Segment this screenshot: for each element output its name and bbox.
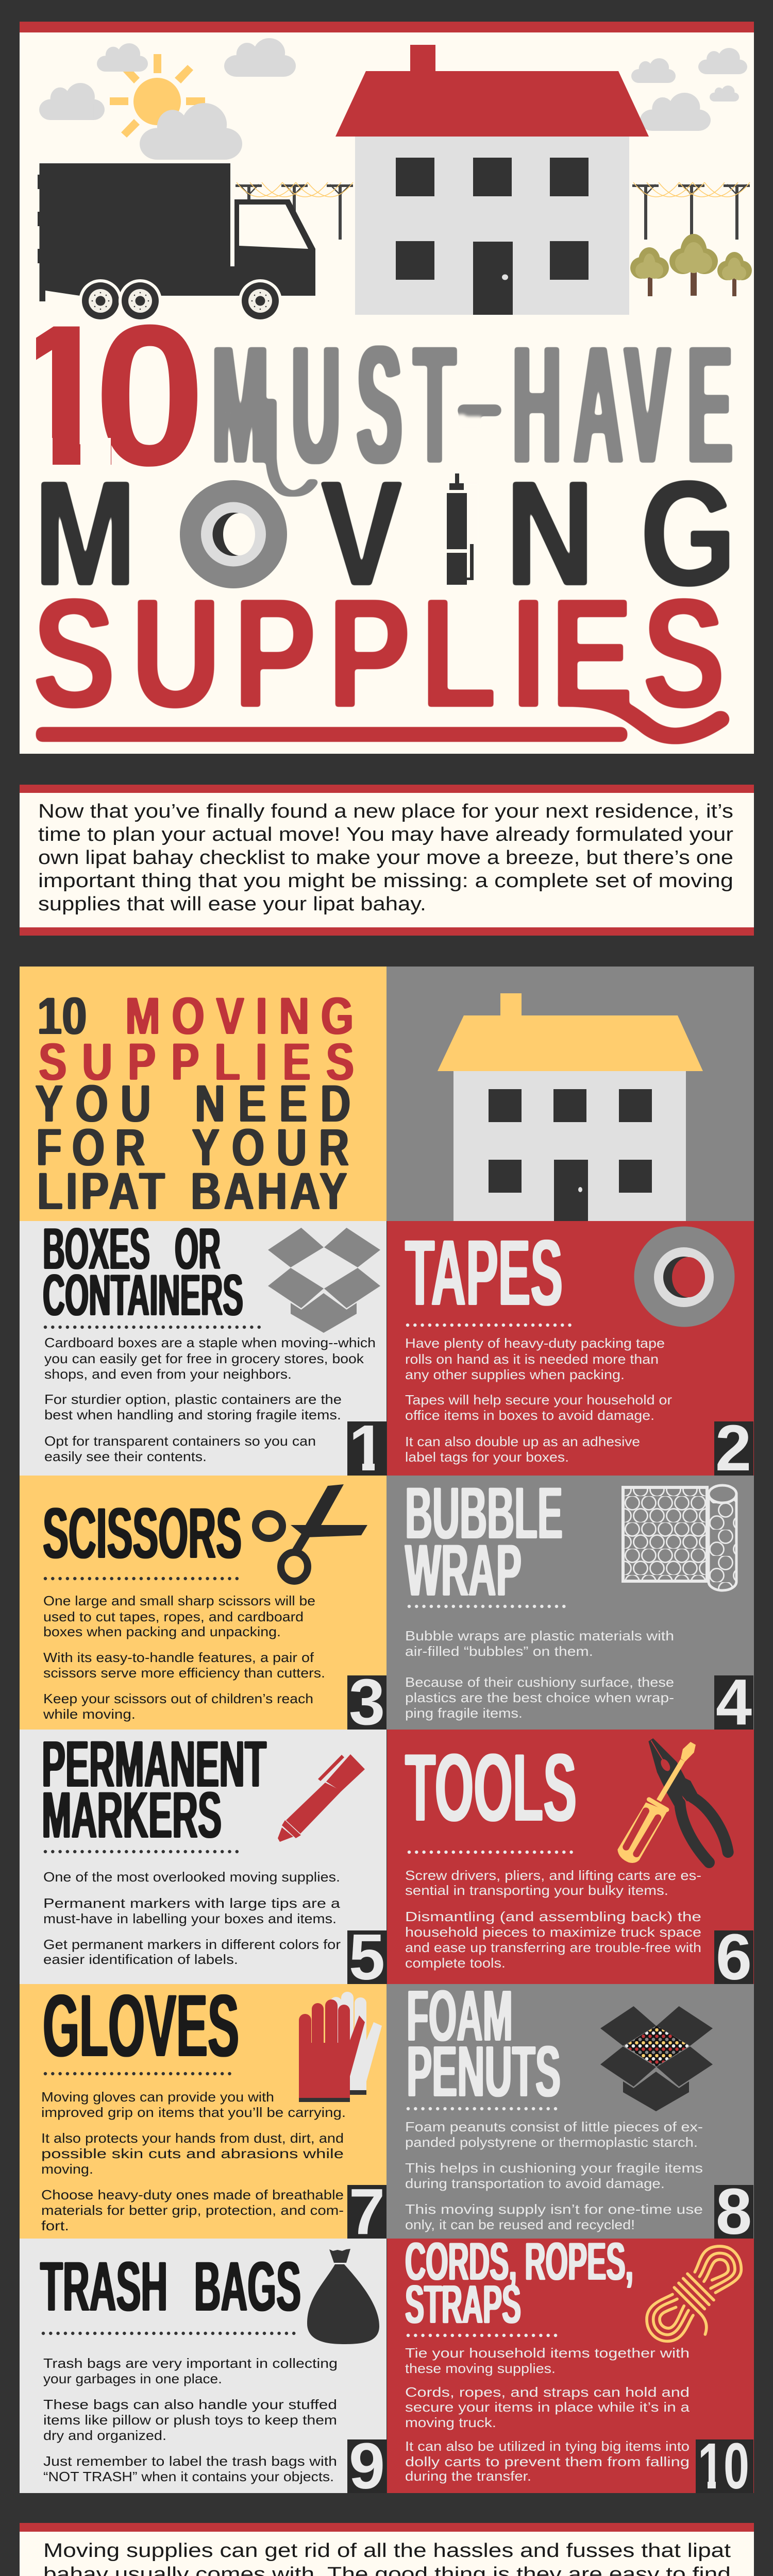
text: tools description: Dismantling (and assembling back) the — [405, 1909, 701, 1924]
icon: scissors — [256, 1484, 367, 1581]
panel: bubble wrap — [386, 1472, 754, 1738]
panel: hero — [5, 22, 754, 754]
text: tapes description: any other supplies when packing. — [405, 1367, 625, 1382]
text: tools description: and ease up transferring are trouble-free with — [405, 1940, 701, 1955]
text: tapes description: label tags for your boxes. — [405, 1449, 569, 1465]
text: cords description — [405, 2345, 690, 2484]
text: cords description: Cords, ropes, and straps can hold and — [405, 2384, 690, 2400]
text: markers description: One of the most overlooked moving supplies. — [43, 1869, 340, 1885]
text: trash bags description — [43, 2355, 338, 2484]
heading: 10 moving supplies you need for your lipat bahay: LIPAT — [37, 1161, 165, 1221]
number 4: 4 — [716, 1666, 752, 1738]
text: bubble wrap description: ping fragile items. — [405, 1705, 523, 1721]
heading: 10 moving supplies you need for your lipat bahay: SUPPLIES — [39, 1032, 354, 1091]
text: markers description: must-have in labelling your boxes and items. — [43, 1911, 337, 1926]
heading: 10 moving supplies you need for your lipat bahay: BAHAY — [191, 1161, 347, 1221]
panel: scissors — [20, 1476, 386, 1738]
text: foam description: This moving supply isn’t for one-time use — [405, 2201, 703, 2217]
number 5: 5 — [349, 1921, 385, 1993]
heading: bubble wrap: WRAP — [405, 1530, 522, 1612]
icon: house with yellow roof — [438, 993, 703, 1222]
heading: cords, ropes, straps: STRAPS — [405, 2274, 521, 2335]
title: supplies: SUPPLIES — [32, 566, 726, 740]
text: cords description: It can also be utilized in tying big items into — [405, 2438, 690, 2454]
text: bubble wrap description: Bubble wraps are plastic materials with — [405, 1628, 674, 1643]
text: gloves description: possible skin cuts and abrasions while — [41, 2146, 344, 2161]
text: introduction paragraph: Now that you’ve finally found a new place for your next residence, it’s — [38, 801, 733, 822]
text: conclusion paragraph — [43, 2540, 731, 2576]
number 7: 7 — [349, 2175, 385, 2248]
text: trash bags description: your garbages in one place. — [43, 2371, 222, 2386]
text: trash bags description: dry and organized. — [43, 2428, 166, 2443]
icon: clouds — [39, 38, 747, 160]
heading: boxes or containers: BOXES OR — [43, 1216, 221, 1282]
heading: boxes or containers: CONTAINERS — [43, 1263, 243, 1328]
icon: tape in title — [180, 480, 287, 588]
text: cords description: moving truck. — [405, 2415, 496, 2430]
panel: trash bags — [20, 2239, 386, 2502]
text: gloves description: It also protects your hands from dust, dirt, and — [41, 2130, 344, 2146]
panel: section header — [20, 967, 754, 1222]
text: tapes description: Have plenty of heavy-duty packing tape — [405, 1335, 665, 1351]
panel: conclusion — [20, 2523, 754, 2576]
text: foam description: This helps in cushioning your fragile items — [405, 2160, 703, 2176]
heading: cords, ropes, straps — [405, 2232, 633, 2335]
text: markers description: Get permanent markers in different colors for — [43, 1937, 341, 1952]
icon: utility poles left — [236, 182, 353, 240]
text: introduction paragraph: supplies that will ease your lipat bahay. — [38, 893, 426, 915]
heading: permanent markers — [42, 1727, 266, 1852]
text: gloves description — [41, 2089, 346, 2233]
heading: permanent markers: PERMANENT — [42, 1727, 266, 1801]
icon: marker in title — [447, 473, 474, 585]
number 1: 1 — [349, 1412, 385, 1484]
number 9: 9 — [349, 2430, 385, 2502]
heading: foam penuts: FOAM — [407, 1975, 513, 2056]
number 8: 8 — [716, 2175, 752, 2248]
text: gloves description: fort. — [41, 2218, 69, 2233]
heading: tapes: TAPES — [405, 1220, 563, 1325]
number 10: 10 — [698, 2430, 749, 2502]
text: tapes description — [405, 1335, 672, 1465]
icon: gloves — [299, 1992, 382, 2102]
text: scissors description: scissors serve more efficiency than cutters. — [43, 1665, 325, 1681]
heading: scissors: SCISSORS — [43, 1493, 242, 1573]
icon: sun — [110, 54, 205, 138]
title: moving: M OV ING — [34, 449, 736, 617]
text: foam description — [405, 2119, 703, 2232]
panel: tapes — [387, 1220, 754, 1484]
icon: house — [335, 45, 649, 315]
text: scissors description: used to cut tapes, ropes, and cardboard — [43, 1609, 304, 1624]
text: boxes description: easily see their contents. — [44, 1449, 207, 1464]
heading: 10 moving supplies you need for your lipat bahay — [35, 986, 354, 1221]
text: boxes description: For sturdier option, plastic containers are the — [44, 1392, 342, 1407]
text: boxes description: Opt for transparent containers so you can — [44, 1433, 316, 1449]
icon: moving truck — [38, 163, 315, 323]
heading: 10 moving supplies you need for your lipat bahay: FOR — [36, 1117, 145, 1177]
panel: boxes or containers — [20, 1216, 386, 1484]
text: tapes description: It can also double up as an adhesive — [405, 1434, 640, 1449]
text: introduction paragraph: important thing that you might be missing: a complete set of moving — [38, 870, 733, 892]
text: introduction paragraph: own lipat bahay checklist to make your move a breeze, but there’s one — [38, 847, 733, 869]
text: markers description — [43, 1869, 341, 1967]
text: scissors description: Keep your scissors out of children’s reach — [43, 1691, 313, 1706]
icon: box of foam peanuts — [600, 2006, 713, 2111]
text: bubble wrap description: Because of their cushiony surface, these — [405, 1674, 674, 1690]
text: trash bags description: Trash bags are very important in collecting — [43, 2355, 338, 2371]
title: must-have: MUST-HAVE — [212, 311, 732, 499]
icon: utility poles right — [632, 182, 750, 240]
text: boxes description — [44, 1335, 376, 1464]
icon: rope — [647, 2246, 741, 2341]
text: tools description: household pieces to maximize truck space — [405, 1924, 701, 1940]
text: markers description: easier identification of labels. — [43, 1952, 238, 1967]
text: cords description: dolly carts to prevent them from falling — [405, 2454, 690, 2469]
icon: trash bag — [307, 2249, 379, 2344]
text: gloves description: materials for better grip, protection, and com- — [41, 2202, 344, 2218]
text: conclusion paragraph: Moving supplies can get rid of all the hassles and fusses that lipat — [43, 2540, 731, 2562]
text: foam description: Foam peanuts consist of little pieces of ex- — [405, 2119, 703, 2134]
text: foam description: panded polystyrene or thermoplastic starch. — [405, 2134, 698, 2150]
heading: tools: TOOLS — [405, 1734, 577, 1841]
icon: marker — [278, 1754, 365, 1842]
text: trash bags description: These bags can also handle your stuffed — [43, 2397, 337, 2412]
text: cords description: during the transfer. — [405, 2468, 531, 2484]
text: scissors description: boxes when packing and unpacking. — [43, 1624, 281, 1639]
text: tools description — [405, 1868, 701, 1971]
text: tapes description: office items in boxes to avoid damage. — [405, 1408, 654, 1423]
text: tools description: sential in transporting your bulky items. — [405, 1883, 668, 1898]
icon: open box — [268, 1228, 380, 1333]
panel: permanent markers — [20, 1727, 386, 1993]
icon: pliers and screwdriver — [617, 1738, 728, 1863]
heading: permanent markers: MARKERS — [42, 1778, 222, 1852]
heading: gloves: GLOVES — [43, 1976, 239, 2075]
panel: gloves — [20, 1976, 386, 2248]
heading: trash bags: TRASH BAGS — [40, 2247, 301, 2326]
text: tools description: complete tools. — [405, 1955, 506, 1971]
text: trash bags description: items like pillow or plush toys to keep them — [43, 2412, 337, 2428]
text: scissors description: One large and small sharp scissors will be — [43, 1593, 315, 1608]
number 3: 3 — [349, 1666, 385, 1738]
heading: 10 moving supplies you need for your lipat bahay: 10 — [37, 987, 87, 1046]
heading: 10 moving supplies you need for your lipat bahay: YOU — [35, 1074, 151, 1133]
heading: 10 moving supplies you need for your lipat bahay: YOUR — [192, 1117, 349, 1177]
text: tapes description: Tapes will help secure your household or — [405, 1392, 672, 1408]
title: 10: 10 — [5, 283, 206, 507]
text: gloves description: Moving gloves can provide you with — [41, 2089, 274, 2105]
text: cords description: these moving supplies. — [405, 2361, 556, 2376]
text: foam description: during transportation to avoid damage. — [405, 2176, 665, 2191]
text: boxes description: you can easily get for free in grocery stores, book — [44, 1351, 364, 1366]
text: scissors description: With its easy-to-handle features, a pair of — [43, 1650, 314, 1665]
panel: tools — [387, 1730, 754, 1993]
heading: bubble wrap: BUBBLE — [405, 1472, 563, 1554]
text: bubble wrap description — [405, 1628, 674, 1721]
text: cords description: Tie your household items together with — [405, 2345, 690, 2361]
text: gloves description: Choose heavy-duty ones made of breathable — [41, 2187, 344, 2202]
text: markers description: Permanent markers with large tips are a — [43, 1895, 341, 1911]
text: boxes description: best when handling and storing fragile items. — [44, 1407, 341, 1422]
text: bubble wrap description: air-filled “bubbles” on them. — [405, 1643, 593, 1659]
text: gloves description: moving. — [41, 2161, 93, 2177]
text: gloves description: improved grip on items that you’ll be carrying. — [41, 2105, 346, 2120]
heading: foam penuts: PENUTS — [407, 2030, 561, 2112]
number 10 — [696, 2439, 753, 2493]
heading: boxes or containers — [43, 1216, 243, 1328]
text: boxes description: Cardboard boxes are a staple when moving--which — [44, 1335, 376, 1350]
text: tools description: Screw drivers, pliers, and lifting carts are es- — [405, 1868, 701, 1883]
text: boxes description: shops, and even from your neighbors. — [44, 1366, 292, 1382]
text: foam description: only, it can be reused and recycled! — [405, 2217, 635, 2232]
icon: trees — [630, 234, 752, 296]
text: bubble wrap description: plastics are the best choice when wrap- — [405, 1690, 674, 1705]
text: introduction paragraph — [38, 801, 733, 915]
number 6: 6 — [716, 1921, 752, 1993]
heading: foam penuts — [407, 1975, 561, 2112]
text: scissors description — [43, 1593, 325, 1722]
text: tapes description: rolls on hand as it is needed more than — [405, 1351, 659, 1367]
text: trash bags description: “NOT TRASH” when it contains your objects. — [43, 2469, 334, 2484]
panel: foam peanuts — [386, 1975, 754, 2248]
panel: cords, ropes, straps — [387, 2232, 754, 2502]
icon: bubble wrap roll — [623, 1485, 736, 1590]
text: scissors description: while moving. — [43, 1706, 136, 1722]
heading: 10 moving supplies you need for your lipat bahay: NEED — [195, 1074, 350, 1133]
heading: 10 moving supplies you need for your lipat bahay: MOVING — [125, 986, 354, 1045]
text: introduction paragraph: time to plan your actual move! You may have already formulated your — [38, 824, 733, 845]
heading: bubble wrap — [405, 1472, 563, 1612]
panel: introduction — [20, 785, 754, 936]
text: cords description: secure your items in place while it’s in a — [405, 2399, 690, 2415]
icon: tape roll — [634, 1226, 735, 1327]
number 2: 2 — [715, 1412, 751, 1484]
text: trash bags description: Just remember to label the trash bags with — [43, 2453, 337, 2469]
